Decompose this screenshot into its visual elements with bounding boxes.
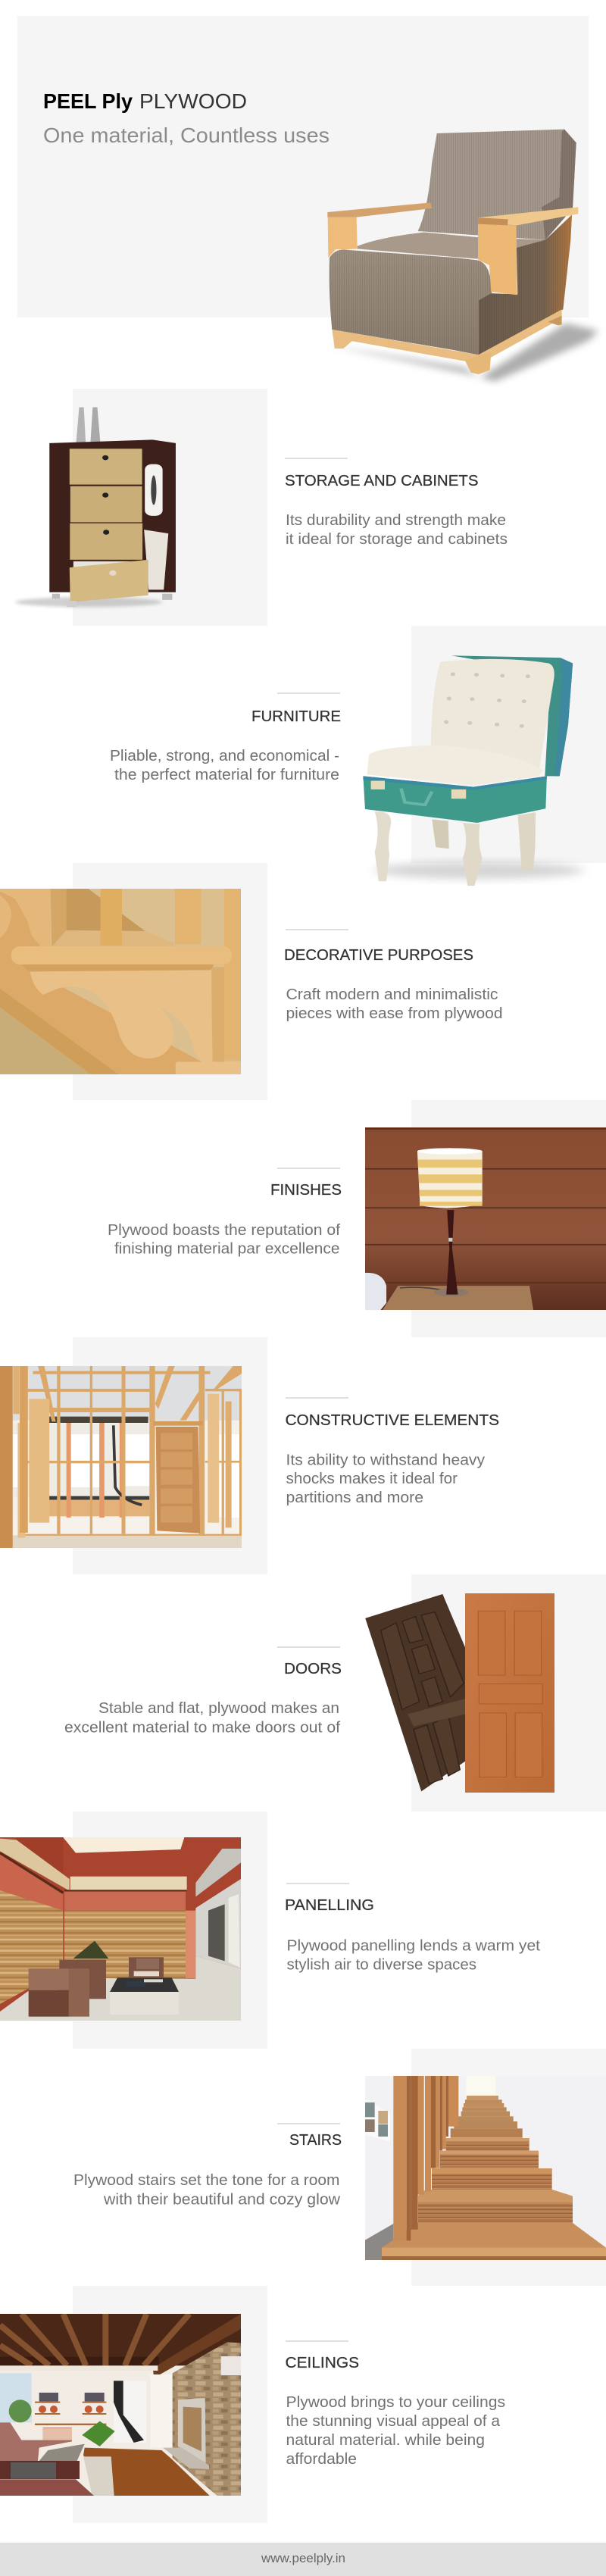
panel: panelling [73,1812,267,2049]
footer [0,2543,606,2576]
divider and heading: finishes [270,1168,342,1199]
divider and heading: furniture [251,692,341,725]
body text: panelling: Plywood panelling lends a warm yet [286,1938,540,1955]
section: storage and cabinets [15,389,508,626]
body text: decorative: pieces with ease from plywood [286,1005,503,1022]
body text: decorative: Craft modern and minimalistic [286,986,498,1003]
body text: storage: it ideal for storage and cabinets [286,531,508,548]
icon: dark door [365,1594,465,1791]
title: plywood: PLYWOOD [139,89,247,113]
hero panel [17,16,589,317]
section: doors [64,1574,606,1812]
divider and heading: furniture: FURNITURE [251,708,341,725]
body text: furniture [110,748,339,783]
icon: orange door [465,1593,554,1793]
body text: finishes: Plywood boasts the reputation of [108,1222,340,1239]
photo: panelled lounge [0,1837,241,2021]
panel: constructive [73,1337,267,1574]
footer url: www.peelply.in [261,2551,345,2565]
body text: finishes [108,1222,340,1258]
body text: stairs: Plywood stairs set the tone for a room [73,2172,339,2189]
panel: doors [411,1574,606,1812]
body text: storage: Its durability and strength make [286,512,506,529]
cabinet illustration [15,408,176,608]
divider and heading: constructive: CONSTRUCTIVE ELEMENTS [285,1412,499,1429]
body text: panelling: stylish air to diverse spaces [286,1956,476,1973]
divider and heading: ceilings: CEILINGS [285,2355,359,2371]
divider and heading: decorative: DECORATIVE PURPOSES [284,947,473,964]
body text: ceilings: natural material. while being [286,2432,485,2449]
body text: constructive: Its ability to withstand heavy [286,1452,485,1468]
divider and heading: storage: STORAGE AND CABINETS [285,473,479,489]
body text: panelling [286,1938,540,1973]
body text: constructive: partitions and more [286,1490,423,1506]
body text: finishes: finishing material par excellence [114,1241,339,1258]
section: stairs [73,2049,606,2286]
body text: stairs [73,2172,341,2208]
divider and heading: stairs: STAIRS [289,2132,342,2149]
body text: constructive [286,1452,485,1506]
footer bar [0,2543,606,2576]
photo: carved stair bracket [0,889,241,1074]
panel: stairs [411,2049,606,2286]
body text: furniture: the perfect material for furniture [114,767,339,783]
divider and heading: ceilings [285,2340,359,2371]
divider and heading: doors: DOORS [284,1661,342,1677]
body text: decorative [286,986,503,1022]
photo: plywood staircase [365,2076,606,2260]
divider and heading: panelling [285,1883,374,1914]
body text: ceilings: the stunning visual appeal of a [286,2413,501,2430]
body text: furniture: Pliable, strong, and economical - [110,748,339,764]
panel: decorative [73,863,267,1100]
photo: timber framing with door [0,1366,242,1548]
section: finishes [108,1100,606,1337]
divider and heading: stairs [277,2123,342,2149]
body text: doors: excellent material to make doors out of [64,1720,340,1737]
subtitle: One material, Countless uses [43,123,330,147]
body text: stairs: with their beautiful and cozy glow [103,2191,341,2208]
photo: lamp on wood wall [365,1127,606,1310]
section: panelling [0,1812,540,2049]
body text: ceilings: affordable [286,2451,357,2468]
panel: ceilings [73,2286,267,2523]
panel: storage [73,389,267,626]
panel: furniture [411,626,606,863]
body text: storage [286,512,508,548]
body text: constructive: shocks makes it ideal for [286,1471,458,1487]
body text: ceilings: Plywood brings to your ceilings [286,2394,505,2411]
section: decorative purposes [0,863,503,1100]
panel: finishes [411,1100,606,1337]
hero section [17,16,598,381]
suitcase chair illustration [363,655,583,886]
section: constructive elements [0,1337,499,1574]
body text: doors: Stable and flat, plywood makes an [98,1700,339,1717]
armchair illustration [327,129,600,385]
divider and heading: doors [277,1646,342,1677]
section: ceilings [0,2286,505,2523]
section: furniture [110,626,606,886]
body text: ceilings [286,2394,505,2468]
divider and heading: panelling: PANELLING [285,1897,374,1914]
title: PEEL Ply [43,89,133,113]
body text: doors [64,1700,340,1737]
divider and heading: finishes: FINISHES [270,1182,342,1199]
photo: living room with wood ceiling [0,2314,241,2496]
